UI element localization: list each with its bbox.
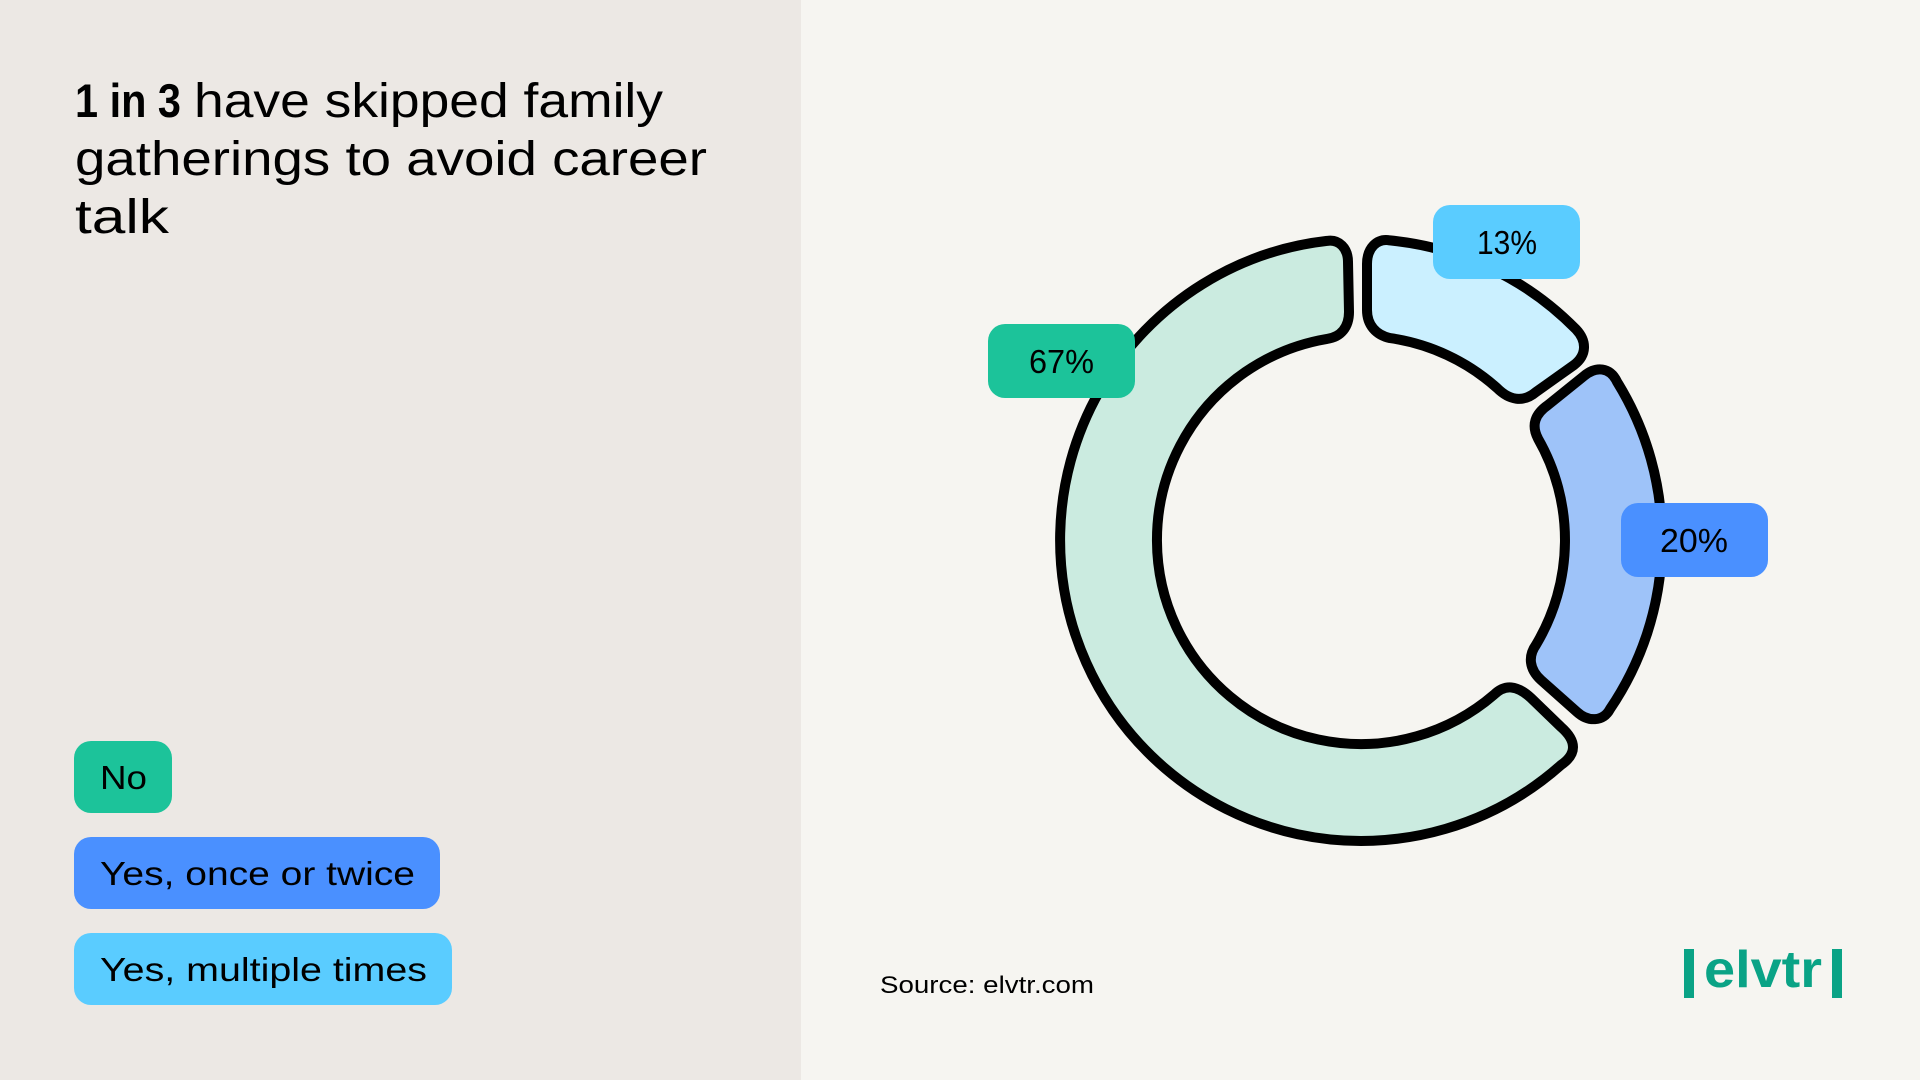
- panel: left sidebar: [0, 0, 801, 1080]
- data label: 67%: 67%: [1029, 343, 1094, 380]
- data label: 13%: [1433, 205, 1580, 279]
- data label: 67%: [988, 324, 1135, 398]
- legend item: No: No: [100, 759, 147, 796]
- title: talk: [75, 191, 170, 244]
- legend item: Yes, once or twice: Yes, once or twice: [100, 855, 415, 892]
- logo: elvtr: elvtr: [1704, 941, 1822, 999]
- legend item: Yes, multiple times: Yes, multiple times: [100, 951, 427, 988]
- source note: Source: elvtr.com: [880, 972, 1094, 999]
- data label: 20%: 20%: [1660, 522, 1728, 559]
- donut chart: [1060, 240, 1662, 841]
- legend item: No: [74, 741, 172, 813]
- title: [75, 74, 707, 244]
- segment: Yes, multiple times 13%: [1367, 240, 1584, 399]
- data label: 20%: [1621, 503, 1768, 577]
- data label: 13%: 13%: [1477, 224, 1537, 261]
- legend item: Yes, once or twice: [74, 837, 440, 909]
- title: gatherings to avoid career: [75, 133, 707, 186]
- segment: Yes, once or twice 20%: [1531, 369, 1662, 719]
- logo: elvtr: [1684, 941, 1842, 999]
- legend: [74, 741, 452, 1005]
- segment: No 67%: [1060, 241, 1573, 841]
- title: 1 in 3: [75, 74, 181, 127]
- legend item: Yes, multiple times: [74, 933, 452, 1005]
- title: have skipped family: [194, 75, 663, 128]
